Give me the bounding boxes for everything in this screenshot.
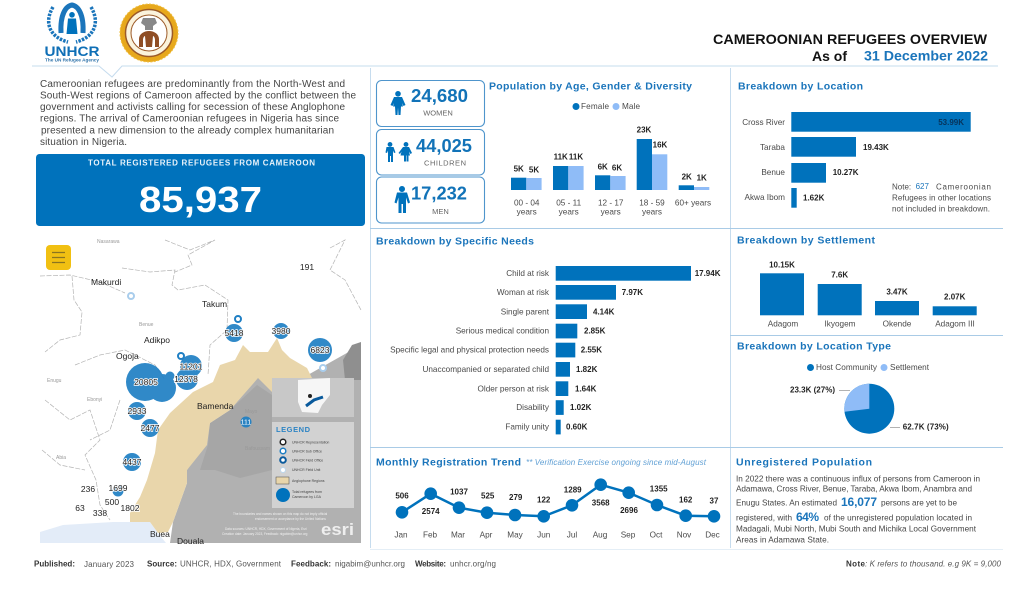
chart legend xyxy=(807,363,930,372)
pie chart xyxy=(790,384,949,434)
city labels: Enugu xyxy=(47,378,62,384)
grouped bar chart: years xyxy=(517,208,537,216)
map credits and esri mark: esri xyxy=(321,520,354,539)
line chart: 506 xyxy=(395,492,409,501)
KPI card: children: CHILDREN xyxy=(424,158,466,168)
line chart: Jan xyxy=(394,530,408,540)
horizontal bar chart xyxy=(390,266,721,434)
legend: UNHCR Field Office xyxy=(292,458,323,462)
footer xyxy=(34,560,1002,569)
line chart: Sep xyxy=(621,530,636,540)
city labels: Buea xyxy=(150,529,170,539)
grouped bar chart: 6K xyxy=(598,162,608,171)
column chart: 7.6K xyxy=(831,271,848,280)
line chart: 1289 xyxy=(564,486,582,495)
panel: population by age and gender xyxy=(489,80,711,216)
body text: persons are yet to be xyxy=(881,498,957,508)
intro text block: government and activists calling for secession of these Anglophone xyxy=(40,102,345,113)
total refugees callout: 85,937 xyxy=(139,179,262,220)
city labels: Adikpo xyxy=(144,335,170,345)
line chart: 162 xyxy=(679,496,693,505)
column chart: Adagom III xyxy=(935,320,975,329)
note: Refugees in other locations xyxy=(892,194,991,202)
total refugees callout: TOTAL REGISTERED REFUGEES FROM CAMEROON xyxy=(88,158,315,168)
map credits and esri mark: The boundaries and names shown on this map do not imply official xyxy=(233,512,327,516)
column chart: 10.15K xyxy=(769,260,795,269)
grouped bar chart: 05 - 11 xyxy=(556,198,582,208)
intro text block: Cameroonian refugees are predominantly from the North-West and xyxy=(40,79,345,90)
grouped bar chart: 11K xyxy=(569,153,583,162)
body text: 16,077 xyxy=(841,495,877,509)
note xyxy=(892,182,991,214)
grouped bar chart: 5K xyxy=(529,166,539,175)
panel: breakdown by settlement xyxy=(737,234,977,329)
legend: Cameroon by LGA xyxy=(292,495,322,499)
icon: woman xyxy=(390,91,406,115)
body text: Adamawa, Cross River, Benue, Taraba, Akwa Ibom, Anambra and xyxy=(736,484,972,494)
body text xyxy=(736,474,980,544)
bubble values: 20805 xyxy=(134,377,158,387)
KPI card: men: MEN xyxy=(432,207,449,216)
intro text block xyxy=(40,79,356,148)
body text: Madagali, Mubi North, Mubi South and Michika Local Government xyxy=(736,524,977,534)
KPI card: children xyxy=(376,130,484,175)
line chart: 279 xyxy=(509,493,523,502)
bubble values: 2933 xyxy=(128,406,147,416)
verification note: ** Verification Exercise ongoing since mid-August xyxy=(526,458,707,467)
refugee location bubbles xyxy=(112,293,332,496)
grouped bar chart: 00 - 04 xyxy=(514,198,540,208)
icon: man xyxy=(394,186,410,213)
pie chart: 62.7K (73%) xyxy=(903,423,949,432)
legend: Anglophone Regions xyxy=(292,479,325,483)
heading: Breakdown by Location xyxy=(738,80,863,92)
map credits and esri mark: Creation date: January 2023, Feedback: nigabim@unhcr.org xyxy=(222,532,308,536)
bubble values: 1802 xyxy=(121,503,140,513)
government seal logo xyxy=(120,4,178,62)
line chart: 122 xyxy=(537,495,551,504)
KPI card: men xyxy=(376,177,484,223)
line chart: 2574 xyxy=(422,507,440,516)
bubble values: 338 xyxy=(93,508,107,518)
horizontal bar chart: Benue xyxy=(761,168,785,177)
horizontal bar chart: 0.60K xyxy=(566,423,588,432)
title: 31 December 2022 xyxy=(864,48,988,64)
body text: In 2022 there was a continuous influx of persons from Cameroon in xyxy=(736,474,980,484)
state boundaries xyxy=(40,240,361,520)
horizontal bar chart: 19.43K xyxy=(863,143,889,152)
note: Note: xyxy=(892,182,911,192)
city labels: Takum xyxy=(202,299,227,309)
chart legend: Female xyxy=(581,102,609,111)
footer: nigabim@unhcr.org xyxy=(335,560,405,568)
neighbouring Cameroon in grey xyxy=(170,345,361,543)
line chart: Jun xyxy=(537,530,551,540)
city labels: Bamenda xyxy=(197,401,234,411)
intro text block: South-West regions of Cameroon affected by the conflict between the xyxy=(40,90,356,102)
bubble values: 111 xyxy=(241,420,251,426)
body text: of the unregistered population located in xyxy=(824,514,972,522)
line chart: Feb xyxy=(423,530,438,540)
map credits and esri mark xyxy=(222,512,354,539)
heading: Breakdown by Location Type xyxy=(737,340,891,352)
horizontal bar chart: 53.99K xyxy=(938,118,964,127)
city labels: Ebonyi xyxy=(87,397,102,403)
bubble values: 12378 xyxy=(174,374,198,384)
horizontal bar chart: 1.02K xyxy=(570,403,592,412)
bubble values: 500 xyxy=(105,497,119,507)
column chart xyxy=(760,260,977,329)
pie chart: 23.3K (27%) xyxy=(790,386,835,395)
bubble values xyxy=(75,262,330,518)
body text: registered, with xyxy=(736,514,792,522)
intro text block: presented a new dimension to the already complex humanitarian xyxy=(41,126,334,136)
horizontal bar chart: 1.62K xyxy=(803,194,825,202)
horizontal bar chart: Child at risk xyxy=(506,269,550,278)
icon: children xyxy=(386,142,412,162)
grouped bar chart: 23K xyxy=(637,126,652,135)
heading: Population by Age, Gender & Diversity xyxy=(489,80,692,92)
footer: unhcr.org/ng xyxy=(450,560,496,568)
grouped bar chart: 2K xyxy=(682,173,692,182)
horizontal bar chart xyxy=(742,112,971,208)
intro text block: situation in Nigeria. xyxy=(40,137,127,148)
legend: UNHCR Representation xyxy=(292,440,329,444)
bubble values: 6823 xyxy=(311,345,330,355)
bubble values: 1699 xyxy=(109,483,128,493)
line chart: Oct xyxy=(650,530,663,540)
line chart: 1355 xyxy=(650,484,668,493)
grouped bar chart: years xyxy=(601,208,621,216)
horizontal bar chart: Older person at risk xyxy=(478,384,550,393)
map credits and esri mark: Data sources: UNHCR, HDX, Government of Nigeria, Esri xyxy=(225,527,307,531)
line chart: Apr xyxy=(480,530,493,540)
horizontal bar chart: Unaccompanied or separated child xyxy=(422,365,549,374)
city labels: Douala xyxy=(177,536,204,546)
horizontal bar chart: 17.94K xyxy=(695,269,721,278)
horizontal bar chart: Taraba xyxy=(760,143,785,152)
horizontal bar chart: Single parent xyxy=(501,307,550,316)
line chart: Dec xyxy=(705,530,720,540)
body text: Enugu States. An estimated xyxy=(736,498,837,508)
footer: Feedback: xyxy=(291,560,331,568)
panel: unregistered population xyxy=(736,456,980,544)
heading: Monthly Registration Trend xyxy=(376,456,521,468)
horizontal bar chart: Disability xyxy=(516,403,550,412)
city labels: Mayo xyxy=(245,409,257,415)
title xyxy=(713,32,988,64)
UNHCR logo xyxy=(44,5,100,62)
KPI card: women: WOMEN xyxy=(423,108,453,118)
intro text block: regions. The arrival of Cameroonian refugees in Nigeria has since xyxy=(40,114,339,124)
KPI card: women: 24,680 xyxy=(411,85,468,106)
grouped bar chart: 11K xyxy=(554,153,568,162)
line chart: 1037 xyxy=(450,487,468,496)
city labels: Bafoussam xyxy=(245,446,270,452)
legend: UNHCR Sub Office xyxy=(292,450,322,454)
horizontal bar chart: 1.82K xyxy=(576,365,598,374)
chart legend: Male xyxy=(622,102,640,111)
menu button xyxy=(46,245,71,270)
line chart: May xyxy=(507,530,524,540)
horizontal bar chart: 10.27K xyxy=(833,168,859,177)
line chart: 2696 xyxy=(620,506,638,515)
line chart: Aug xyxy=(593,530,608,540)
UNHCR logo: The UN Refugee Agency xyxy=(45,58,100,62)
map credits and esri mark: endorsement or acceptance by the United Nations xyxy=(255,517,326,521)
horizontal bar chart: Family unity xyxy=(505,423,550,432)
column chart: Ikyogem xyxy=(825,320,856,329)
panel: monthly registration trend xyxy=(376,456,720,540)
horizontal bar chart: Woman at risk xyxy=(497,288,550,297)
bubble values: 236 xyxy=(81,484,95,494)
grouped bar chart xyxy=(511,126,711,216)
panel: breakdown by location type xyxy=(737,340,949,434)
grouped bar chart: 60+ years xyxy=(675,198,711,208)
horizontal bar chart: 4.14K xyxy=(593,307,615,316)
grouped bar chart: 6K xyxy=(612,163,622,172)
title: As of xyxy=(812,49,848,64)
heading: Breakdown by Settlement xyxy=(737,234,876,246)
body text: 64% xyxy=(796,510,819,524)
horizontal bar chart: 7.97K xyxy=(622,288,643,297)
bubble values: 11201 xyxy=(179,362,203,372)
city labels: Abia xyxy=(56,455,66,461)
column chart: 2.07K xyxy=(944,293,966,302)
anglophone regions in tan xyxy=(130,338,327,533)
horizontal bar chart: 2.85K xyxy=(584,327,606,336)
horizontal bar chart: 2.55K xyxy=(581,346,602,355)
heading: Breakdown by Specific Needs xyxy=(376,236,534,248)
grouped bar chart: 16K xyxy=(653,141,668,150)
footer: Published: xyxy=(34,560,75,568)
city labels xyxy=(47,239,270,546)
bubble values: 3980 xyxy=(272,326,291,336)
grouped bar chart: 18 - 59 xyxy=(639,198,665,208)
icon: laurel wreath with sheltering hands xyxy=(49,5,95,42)
map xyxy=(40,238,361,546)
city labels: Nasarawa xyxy=(97,239,120,245)
heading: Unregistered Population xyxy=(736,456,872,468)
column chart: 3.47K xyxy=(886,288,908,297)
sea xyxy=(40,522,166,543)
bubble values: 2477 xyxy=(141,423,160,433)
panel: breakdown by specific needs xyxy=(376,236,721,434)
bubble values: 5418 xyxy=(225,328,244,338)
chart legend xyxy=(572,102,640,111)
chart legend: Settlement xyxy=(890,363,930,372)
line chart: 37 xyxy=(710,497,719,506)
horizontal bar chart: 1.64K xyxy=(575,384,597,393)
bubble values: 63 xyxy=(75,503,85,513)
legend: LEGEND xyxy=(276,425,311,434)
city labels: Makurdi xyxy=(91,277,121,287)
horizontal bar chart: Cross River xyxy=(742,118,785,127)
title: CAMEROONIAN REFUGEES OVERVIEW xyxy=(713,32,987,47)
UNHCR logo: UNHCR xyxy=(44,43,100,59)
line chart xyxy=(394,478,720,540)
footer: Source: xyxy=(147,560,177,568)
grouped bar chart: years xyxy=(642,208,662,216)
legend xyxy=(272,422,354,508)
bubble values: 191 xyxy=(300,262,314,272)
line chart: 3568 xyxy=(592,499,610,508)
horizontal bar chart: Specific legal and physical protection needs xyxy=(390,346,549,355)
column chart: Adagom xyxy=(768,320,798,329)
footer: UNHCR, HDX, Government xyxy=(180,560,282,568)
grouped bar chart: 12 - 17 xyxy=(598,198,624,208)
legend: Total refugees from xyxy=(292,490,322,494)
note: Cameroonian xyxy=(936,182,991,192)
line chart: Jul xyxy=(567,530,577,540)
footer: January 2023 xyxy=(84,560,135,569)
line chart: Mar xyxy=(451,530,465,540)
footer: : K refers to thousand. e.g 9K = 9,000 xyxy=(865,560,1002,568)
horizontal bar chart: Akwa Ibom xyxy=(744,193,785,202)
city labels: Ogoja xyxy=(116,351,139,361)
KPI card: children: 44,025 xyxy=(416,135,472,156)
note: not included in breakdown. xyxy=(892,204,990,214)
grouped bar chart: 1K xyxy=(697,173,707,182)
column chart: Okende xyxy=(883,320,912,329)
line chart: 525 xyxy=(481,491,495,500)
KPI card: men: 17,232 xyxy=(411,182,467,204)
bubble values: 4437 xyxy=(123,457,142,467)
panel: breakdown by location xyxy=(738,80,991,214)
KPI card: women xyxy=(376,80,484,126)
chart legend: Host Community xyxy=(816,363,878,372)
grouped bar chart: 5K xyxy=(514,165,524,174)
body text: Areas in Adamawa State. xyxy=(736,536,829,544)
horizontal bar chart: Serious medical condition xyxy=(456,327,549,336)
legend: UNHCR Field Unit xyxy=(292,468,320,472)
city labels: Benue xyxy=(139,322,154,328)
note: 627 xyxy=(916,182,929,191)
line chart: Nov xyxy=(677,530,692,540)
grouped bar chart: years xyxy=(559,208,579,216)
total refugees callout xyxy=(36,154,365,226)
footer: Note xyxy=(846,560,866,568)
inset locator map xyxy=(272,378,354,417)
footer: Website: xyxy=(415,560,446,568)
